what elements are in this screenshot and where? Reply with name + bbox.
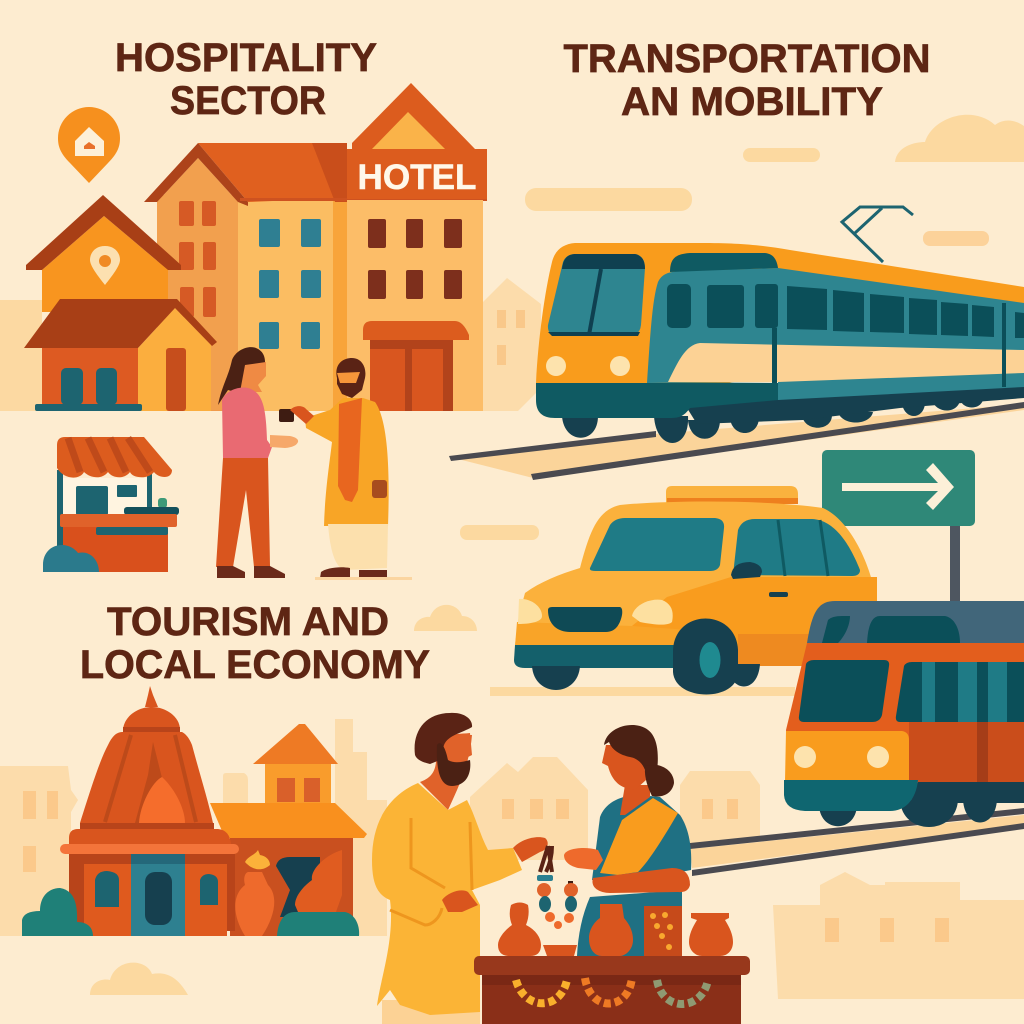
heading: transportation and mobility: TRANSPORTATION xyxy=(564,37,930,81)
hotel block with sign xyxy=(347,83,487,411)
man buying beads xyxy=(372,713,548,1024)
hotel sign: HOTEL xyxy=(358,158,476,197)
small houses xyxy=(24,195,217,411)
food stall xyxy=(43,437,179,572)
cream stripe xyxy=(668,343,1024,382)
yellow taxi xyxy=(514,486,877,694)
side building with pots xyxy=(210,724,367,936)
heading: tourism and local economy xyxy=(80,600,430,687)
market table with pots xyxy=(474,902,750,1024)
windscreen xyxy=(548,254,645,336)
teal body xyxy=(647,268,1024,400)
tracks: lower xyxy=(690,808,1024,876)
man with scarf handing key xyxy=(279,358,412,580)
pantograph xyxy=(842,207,913,262)
tracks: upper xyxy=(449,402,1024,480)
woman tourist xyxy=(216,347,298,578)
bead necklace xyxy=(537,846,578,929)
hotel door xyxy=(363,321,469,411)
woman vendor xyxy=(564,725,691,956)
heading: tourism and local economy: TOURISM AND xyxy=(107,600,389,644)
temple xyxy=(22,686,239,936)
icon: location pin xyxy=(58,107,120,183)
orange tram xyxy=(784,601,1024,827)
heading: hospitality sector: SECTOR xyxy=(170,79,326,123)
electric train xyxy=(536,207,1024,443)
wheels xyxy=(562,400,983,443)
heading: hospitality sector: HOSPITALITY xyxy=(115,36,377,80)
heading: transportation and mobility: AN MOBILITY xyxy=(621,80,883,124)
orange shell xyxy=(536,243,1024,400)
heading: hospitality sector xyxy=(115,36,377,123)
road sign xyxy=(822,450,975,614)
heading: transportation and mobility xyxy=(564,37,930,124)
hotel sign xyxy=(347,149,487,199)
heading: tourism and local economy: LOCAL ECONOMY xyxy=(80,643,430,687)
apartment tower xyxy=(144,143,487,411)
background: lower skyline xyxy=(0,719,1024,999)
skirt xyxy=(536,383,778,418)
undercarriage xyxy=(687,382,1024,424)
hotel complex xyxy=(24,83,487,411)
